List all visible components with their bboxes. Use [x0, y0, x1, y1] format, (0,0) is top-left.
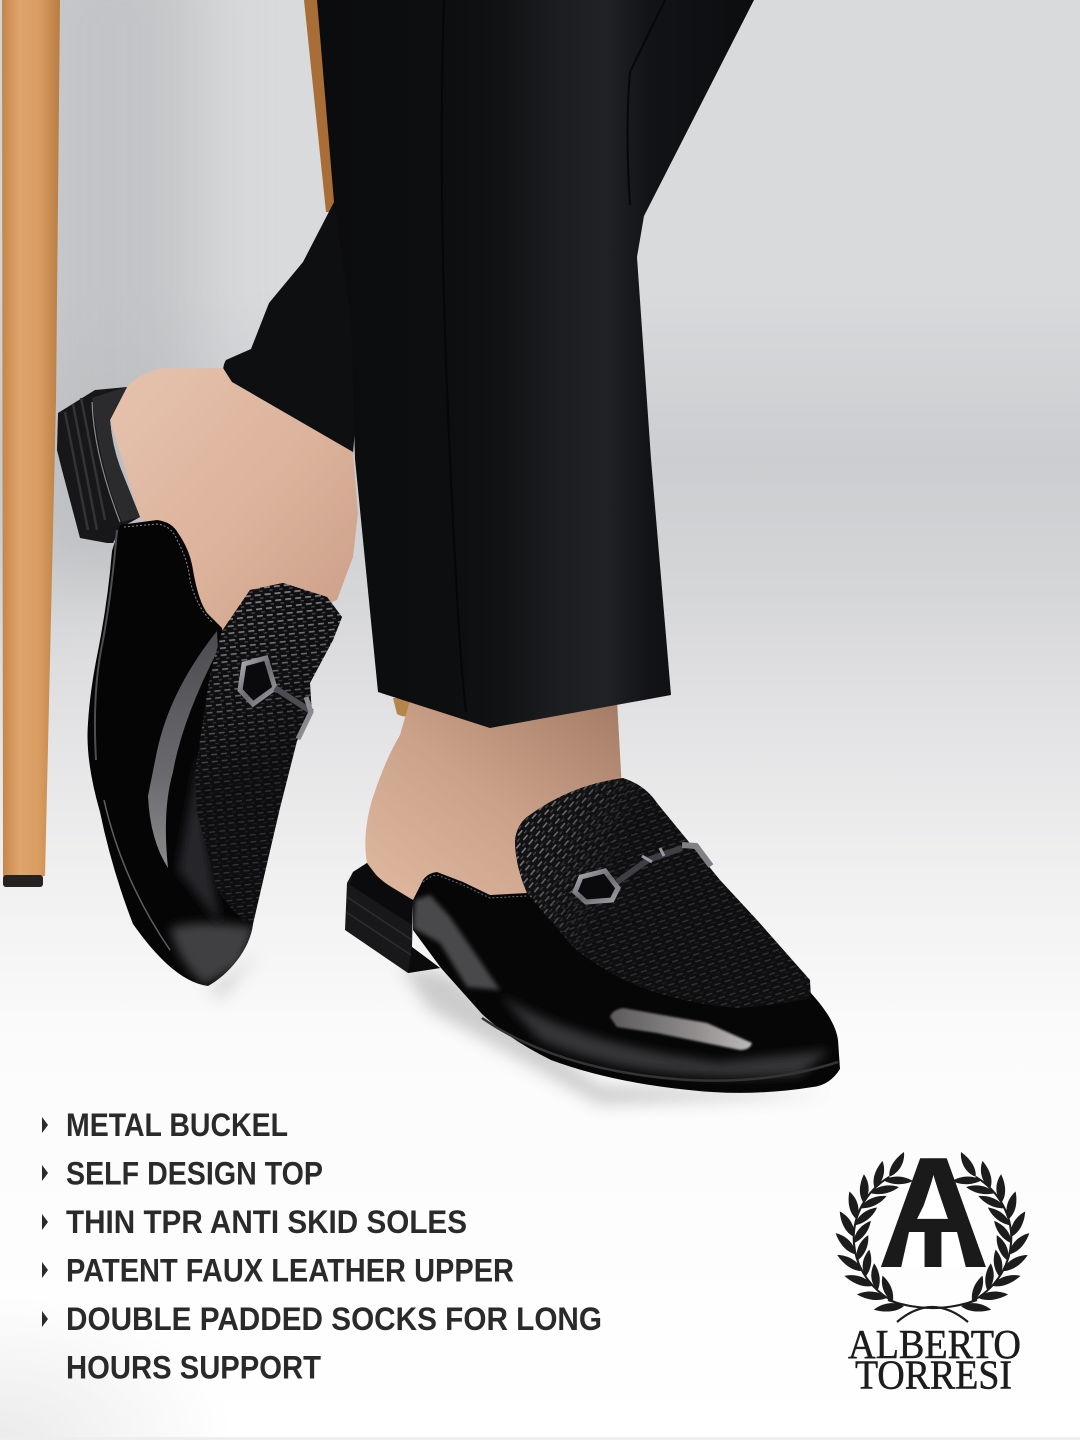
patent upper and sole [413, 872, 840, 1093]
bullet and feature: padded socks [42, 1301, 602, 1386]
brand name [848, 1321, 1021, 1398]
right shoe [345, 778, 840, 1093]
vamp bright dashes [195, 583, 342, 778]
rim highlight [95, 530, 117, 760]
icon: laurel wreath [836, 1152, 1029, 1322]
bullet and feature: self design top: SELF DESIGN TOP [66, 1156, 323, 1192]
left shoe [57, 387, 342, 986]
monogram AT: T [908, 1207, 958, 1279]
bullet and feature: thin soles: THIN TPR ANTI SKID SOLES [66, 1204, 467, 1240]
patent sheen and toe [170, 750, 255, 985]
patent upper [88, 520, 253, 986]
heel stack [345, 863, 440, 973]
left foot [110, 368, 358, 650]
brand name: TORRESI [855, 1352, 1012, 1398]
wreath crossing stems [888, 1300, 977, 1322]
patent sheen [413, 895, 830, 1077]
bullet and feature: padded socks: HOURS SUPPORT [66, 1350, 321, 1386]
heel stack and collar [57, 387, 140, 543]
bullet and feature: patent upper: PATENT FAUX LEATHER UPPER [66, 1252, 514, 1288]
stitching [124, 524, 212, 622]
vamp bright dashes [515, 778, 642, 950]
chair front leg [2, 0, 60, 887]
bullet and feature: padded socks: DOUBLE PADDED SOCKS FOR LONG [66, 1301, 602, 1337]
chair leg tip behind trouser [393, 698, 418, 716]
metal bit [240, 658, 312, 739]
brand logo [836, 1125, 1029, 1398]
textured vamp [515, 778, 811, 1008]
metal bit [575, 845, 711, 902]
chair back leg [304, 0, 338, 212]
floor shadows [110, 870, 830, 1105]
reflection [148, 631, 218, 868]
monogram AT: A [877, 1125, 990, 1301]
toe highlight [610, 1008, 752, 1050]
trouser: rear leg [223, 202, 365, 454]
feature list [42, 1107, 602, 1386]
stitching [423, 875, 527, 898]
right foot [365, 700, 622, 900]
right laurel branch [952, 1152, 1029, 1319]
bullet and feature: metal buckel: METAL BUCKEL [66, 1107, 288, 1143]
textured vamp [195, 583, 342, 924]
left laurel branch [836, 1152, 913, 1319]
trouser: front leg [317, 0, 754, 728]
sole welt [482, 1018, 838, 1081]
brand name: ALBERTO [848, 1321, 1021, 1367]
